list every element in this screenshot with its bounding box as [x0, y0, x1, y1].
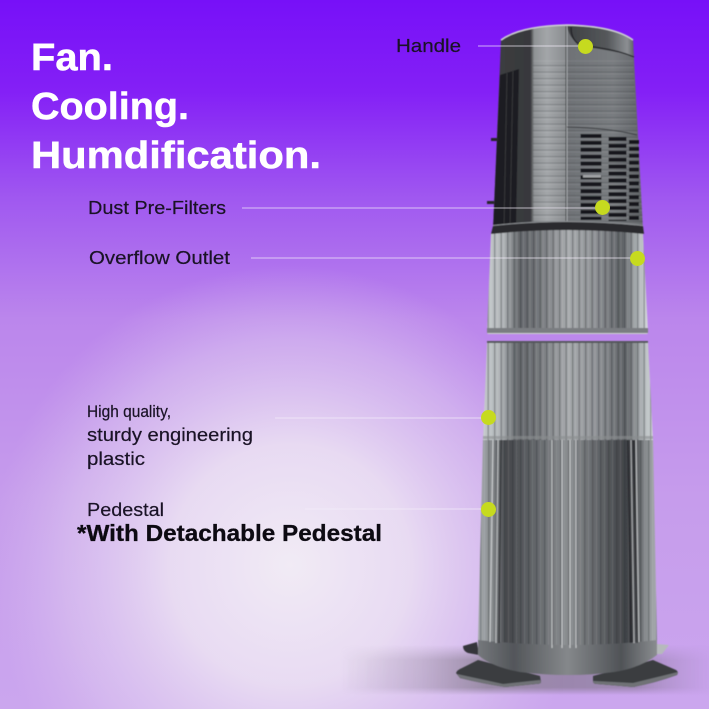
- title: Humdification.: [31, 135, 321, 177]
- lower body, top rib section: [483, 341, 653, 440]
- middle ribbed section: [487, 230, 648, 334]
- side tabs: [487, 138, 498, 204]
- lower body, bottom rib section: [478, 438, 657, 648]
- title: Fan.: [31, 37, 113, 79]
- product: tower cooler: [456, 25, 678, 687]
- top rim highlight: [501, 25, 633, 40]
- right foot: [593, 644, 678, 687]
- handle seam: [571, 27, 634, 57]
- label: handle: Handle: [396, 36, 461, 56]
- upper body: [487, 25, 644, 234]
- bottom trim band: [491, 222, 644, 234]
- vent door outline: [567, 127, 637, 135]
- label: pedestal: Pedestal: [87, 500, 164, 520]
- floor shadow: [360, 647, 702, 694]
- label: high quality plastic: [87, 403, 253, 469]
- label: high quality plastic: plastic: [87, 449, 145, 469]
- marker dots: [481, 39, 645, 517]
- leader lines: [242, 46, 637, 509]
- vent slots: [591, 134, 634, 222]
- left dark grille panel: [493, 69, 519, 230]
- base collar: [478, 638, 657, 675]
- label: high quality plastic: High quality,: [87, 403, 171, 421]
- label: dust pre-filters: Dust Pre-Filters: [88, 198, 226, 218]
- left foot: [456, 642, 541, 687]
- title: Cooling.: [31, 86, 189, 128]
- title: [31, 37, 321, 177]
- note: detachable pedestal: *With Detachable Pedestal: [77, 520, 382, 546]
- label: overflow outlet: Overflow Outlet: [89, 248, 230, 268]
- right cap segment: [567, 26, 634, 57]
- label: high quality plastic: sturdy engineering: [87, 425, 253, 445]
